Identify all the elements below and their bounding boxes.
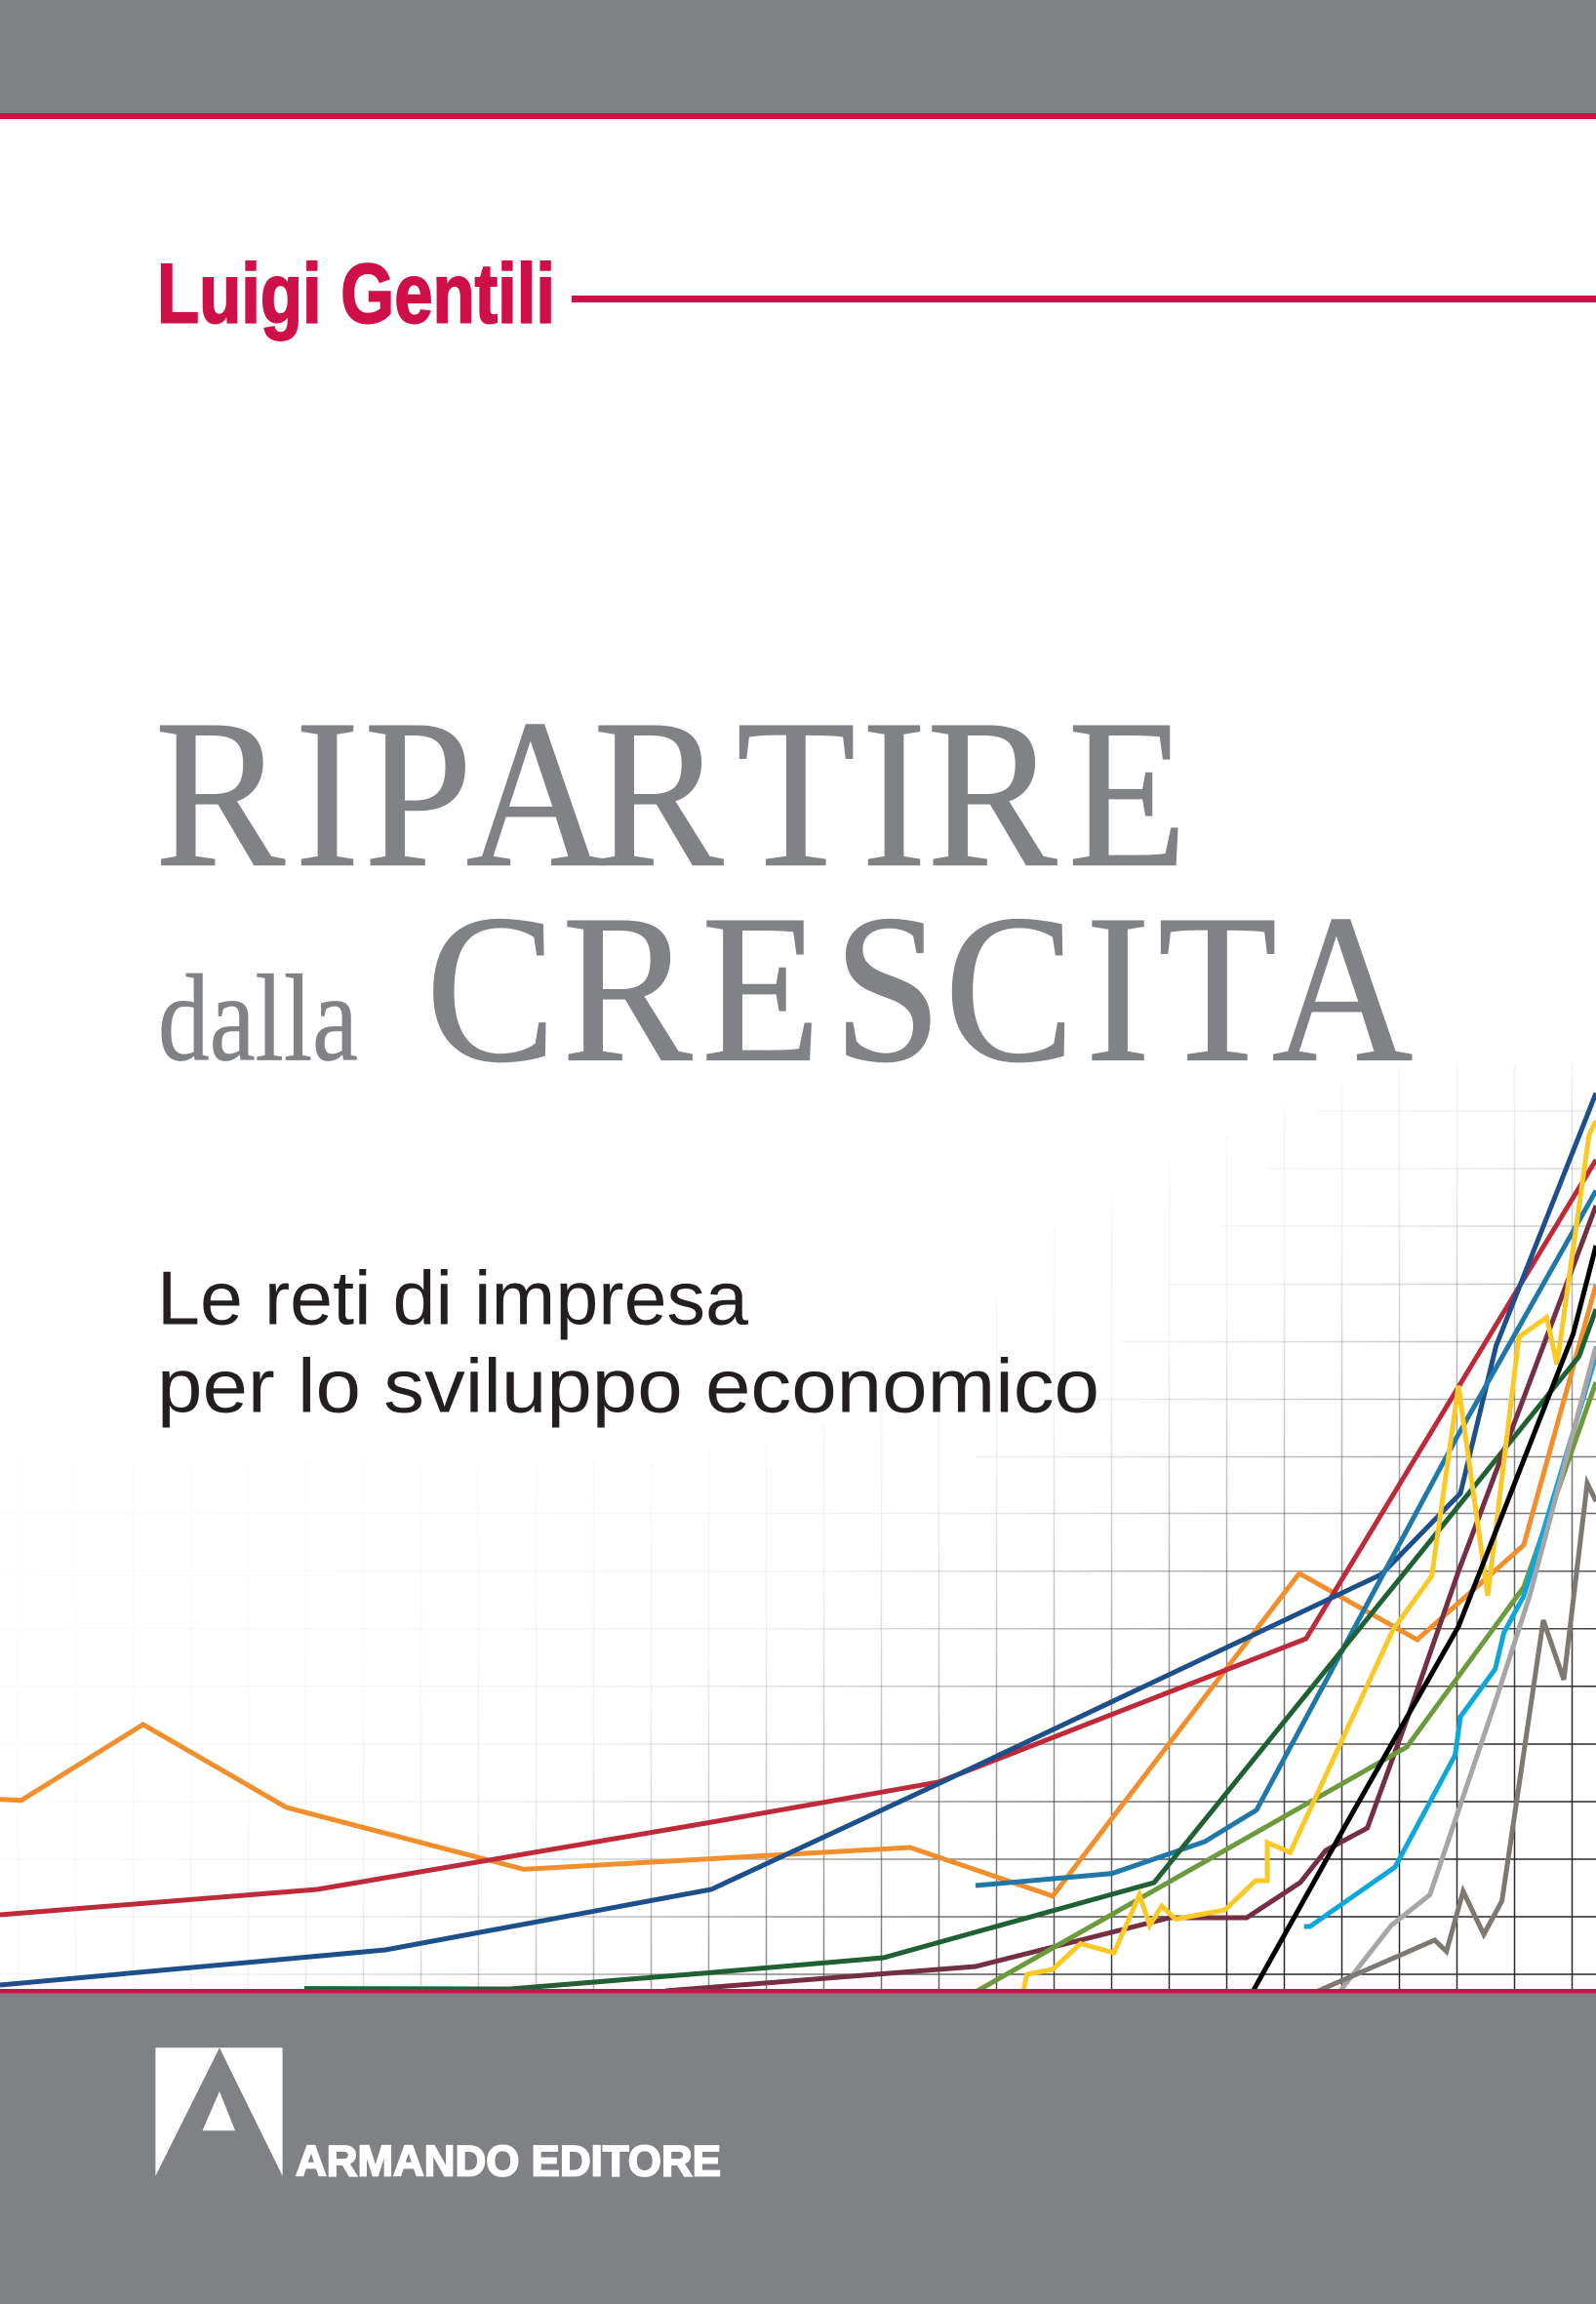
subtitle line 2: per lo sviluppo economico bbox=[157, 1342, 1099, 1428]
line: dark blue bbox=[0, 1093, 1596, 1985]
top grey band bbox=[0, 0, 1596, 113]
subtitle line 1: Le reti di impresa bbox=[157, 1254, 749, 1340]
line: orange bbox=[0, 1285, 1596, 1896]
line: teal blue bbox=[976, 1191, 1596, 1886]
line: black bbox=[1253, 1246, 1596, 1992]
chart: growth lines on fading grid bbox=[0, 1063, 1596, 1992]
title: crescita: CRESCITA bbox=[425, 871, 1413, 1107]
bottom grey band bbox=[0, 1993, 1596, 2304]
line: dark red bbox=[0, 1160, 1596, 1915]
publisher logo bbox=[155, 2047, 721, 2186]
top crimson rule bbox=[0, 113, 1596, 119]
publisher name: ARMANDO EDITORE bbox=[296, 2138, 721, 2186]
line: dark green bbox=[304, 1309, 1596, 1989]
author rule bbox=[572, 296, 1596, 302]
line: yellow bbox=[1023, 1121, 1596, 1992]
line: light grey bbox=[1339, 1346, 1596, 1992]
title: ripartire: RIPARTIRE bbox=[155, 676, 1187, 912]
author name: Luigi Gentili bbox=[157, 248, 555, 341]
logo mark bbox=[155, 2047, 283, 2176]
line: maroon bbox=[665, 1206, 1596, 1991]
bottom crimson rule bbox=[0, 1989, 1596, 1994]
line: cyan bbox=[1304, 1356, 1596, 1927]
line: olive green bbox=[976, 1382, 1596, 1992]
subtitle bbox=[157, 1254, 1099, 1428]
line: brown grey bbox=[1316, 1484, 1596, 1992]
title: dalla: dalla bbox=[158, 951, 358, 1088]
chart grid bbox=[0, 1063, 1596, 1990]
